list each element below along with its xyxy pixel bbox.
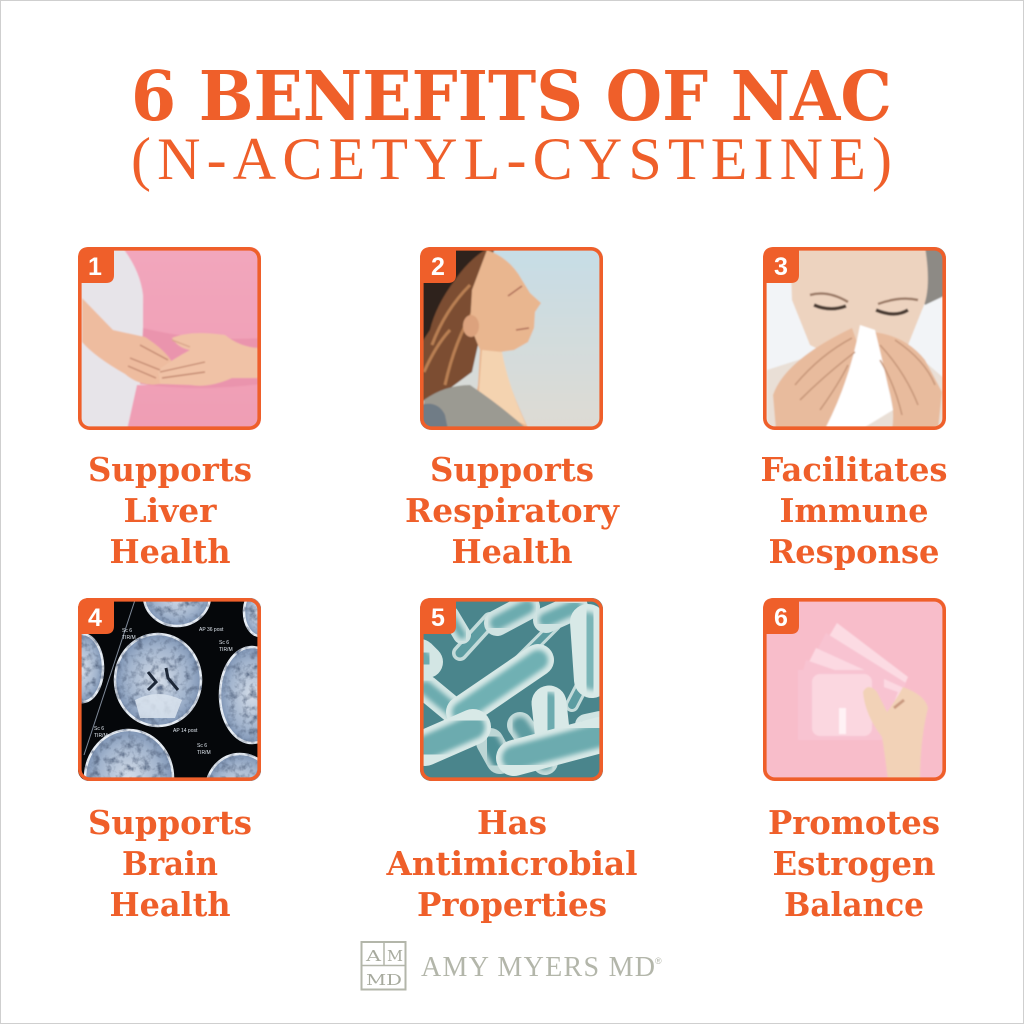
panel: 2 respiratory health [420, 247, 603, 430]
photo: bacteria [420, 598, 603, 781]
frame [422, 600, 601, 779]
number badge: 3 [774, 253, 788, 281]
label: supports liver health [88, 450, 252, 571]
icon: AM MD monogram: M [387, 947, 403, 965]
number badge: 5 [431, 604, 445, 632]
frame [80, 600, 259, 779]
label: supports liver health: Health [110, 532, 230, 571]
frame [765, 600, 944, 779]
label: supports brain health: Supports [88, 803, 252, 842]
panel: 1 liver health [78, 247, 261, 430]
number badge: 2 [431, 253, 445, 281]
label: facilitates immune response [760, 450, 948, 571]
photo: woman breathing [420, 247, 603, 430]
logo: Amy Myers MD [361, 942, 662, 990]
frame [80, 249, 259, 428]
number badge: 6 [774, 604, 788, 632]
label: supports liver health: Liver [124, 491, 217, 530]
panel: 6 estrogen balance [763, 598, 946, 781]
icon: AM MD monogram [361, 942, 406, 990]
label: supports respiratory health: Respiratory [405, 491, 620, 530]
label: has antimicrobial properties: Properties [417, 885, 607, 924]
number badge [420, 598, 456, 634]
label: supports brain health: Brain [122, 844, 218, 883]
photo: brain scans: TIR/M [122, 635, 136, 641]
label: facilitates immune response: Response [768, 532, 940, 571]
label: supports liver health: Supports [88, 450, 252, 489]
photo: brain scans: TIR/M [94, 733, 108, 739]
photo: brain scans: Sc 6 [219, 640, 229, 646]
registered mark: ® [655, 956, 662, 966]
photo: brain scans [78, 598, 261, 781]
label: has antimicrobial properties: Antimicrobial [386, 844, 638, 883]
panel: 5 antimicrobial [420, 598, 603, 781]
wordmark: AMY MYERS MD [421, 952, 655, 983]
icon: AM MD monogram: MD [366, 971, 402, 989]
label: promotes estrogen balance: Estrogen [772, 844, 936, 883]
photo: brain scans: AP 36 post [199, 627, 224, 633]
photo: woman sneezing into tissue [763, 247, 946, 430]
number badge: 4 [88, 604, 102, 632]
number badge [763, 247, 799, 283]
label: supports respiratory health: Supports [430, 450, 594, 489]
label: supports brain health [88, 803, 252, 924]
photo: brain scans: TIR/M [197, 750, 211, 756]
label: facilitates immune response: Facilitates [760, 450, 948, 489]
photo: brain scans: Sc 6 [94, 726, 104, 732]
icon: AM MD monogram: A [365, 947, 381, 965]
panel: 3 immune response [763, 247, 946, 430]
label: supports respiratory health [405, 450, 620, 571]
frame [422, 249, 601, 428]
number badge [78, 598, 114, 634]
photo: hand holding pink pads [763, 598, 946, 781]
number badge [420, 247, 456, 283]
subtitle: (N-ACETYL-CYSTEINE) [131, 126, 892, 192]
panel: 4 brain health [78, 598, 261, 781]
photo: brain scans: Sc 6 [122, 628, 132, 634]
label: facilitates immune response: Immune [780, 491, 928, 530]
label: promotes estrogen balance [768, 803, 940, 924]
label: promotes estrogen balance: Promotes [768, 803, 940, 842]
photo: brain scans: TIR/M [219, 647, 233, 653]
photo: hands on pink shirt [78, 247, 261, 430]
number badge [78, 247, 114, 283]
photo: brain scans: Sc 6 [197, 743, 207, 749]
label: has antimicrobial properties [386, 803, 638, 924]
label: supports brain health: Health [110, 885, 230, 924]
frame [765, 249, 944, 428]
label: has antimicrobial properties: Has [477, 803, 547, 842]
photo: brain scans: AP 14 post [173, 728, 198, 734]
label: supports respiratory health: Health [452, 532, 572, 571]
number badge: 1 [88, 253, 102, 281]
title: 6 BENEFITS OF NAC [131, 57, 892, 137]
label: promotes estrogen balance: Balance [784, 885, 924, 924]
number badge [763, 598, 799, 634]
